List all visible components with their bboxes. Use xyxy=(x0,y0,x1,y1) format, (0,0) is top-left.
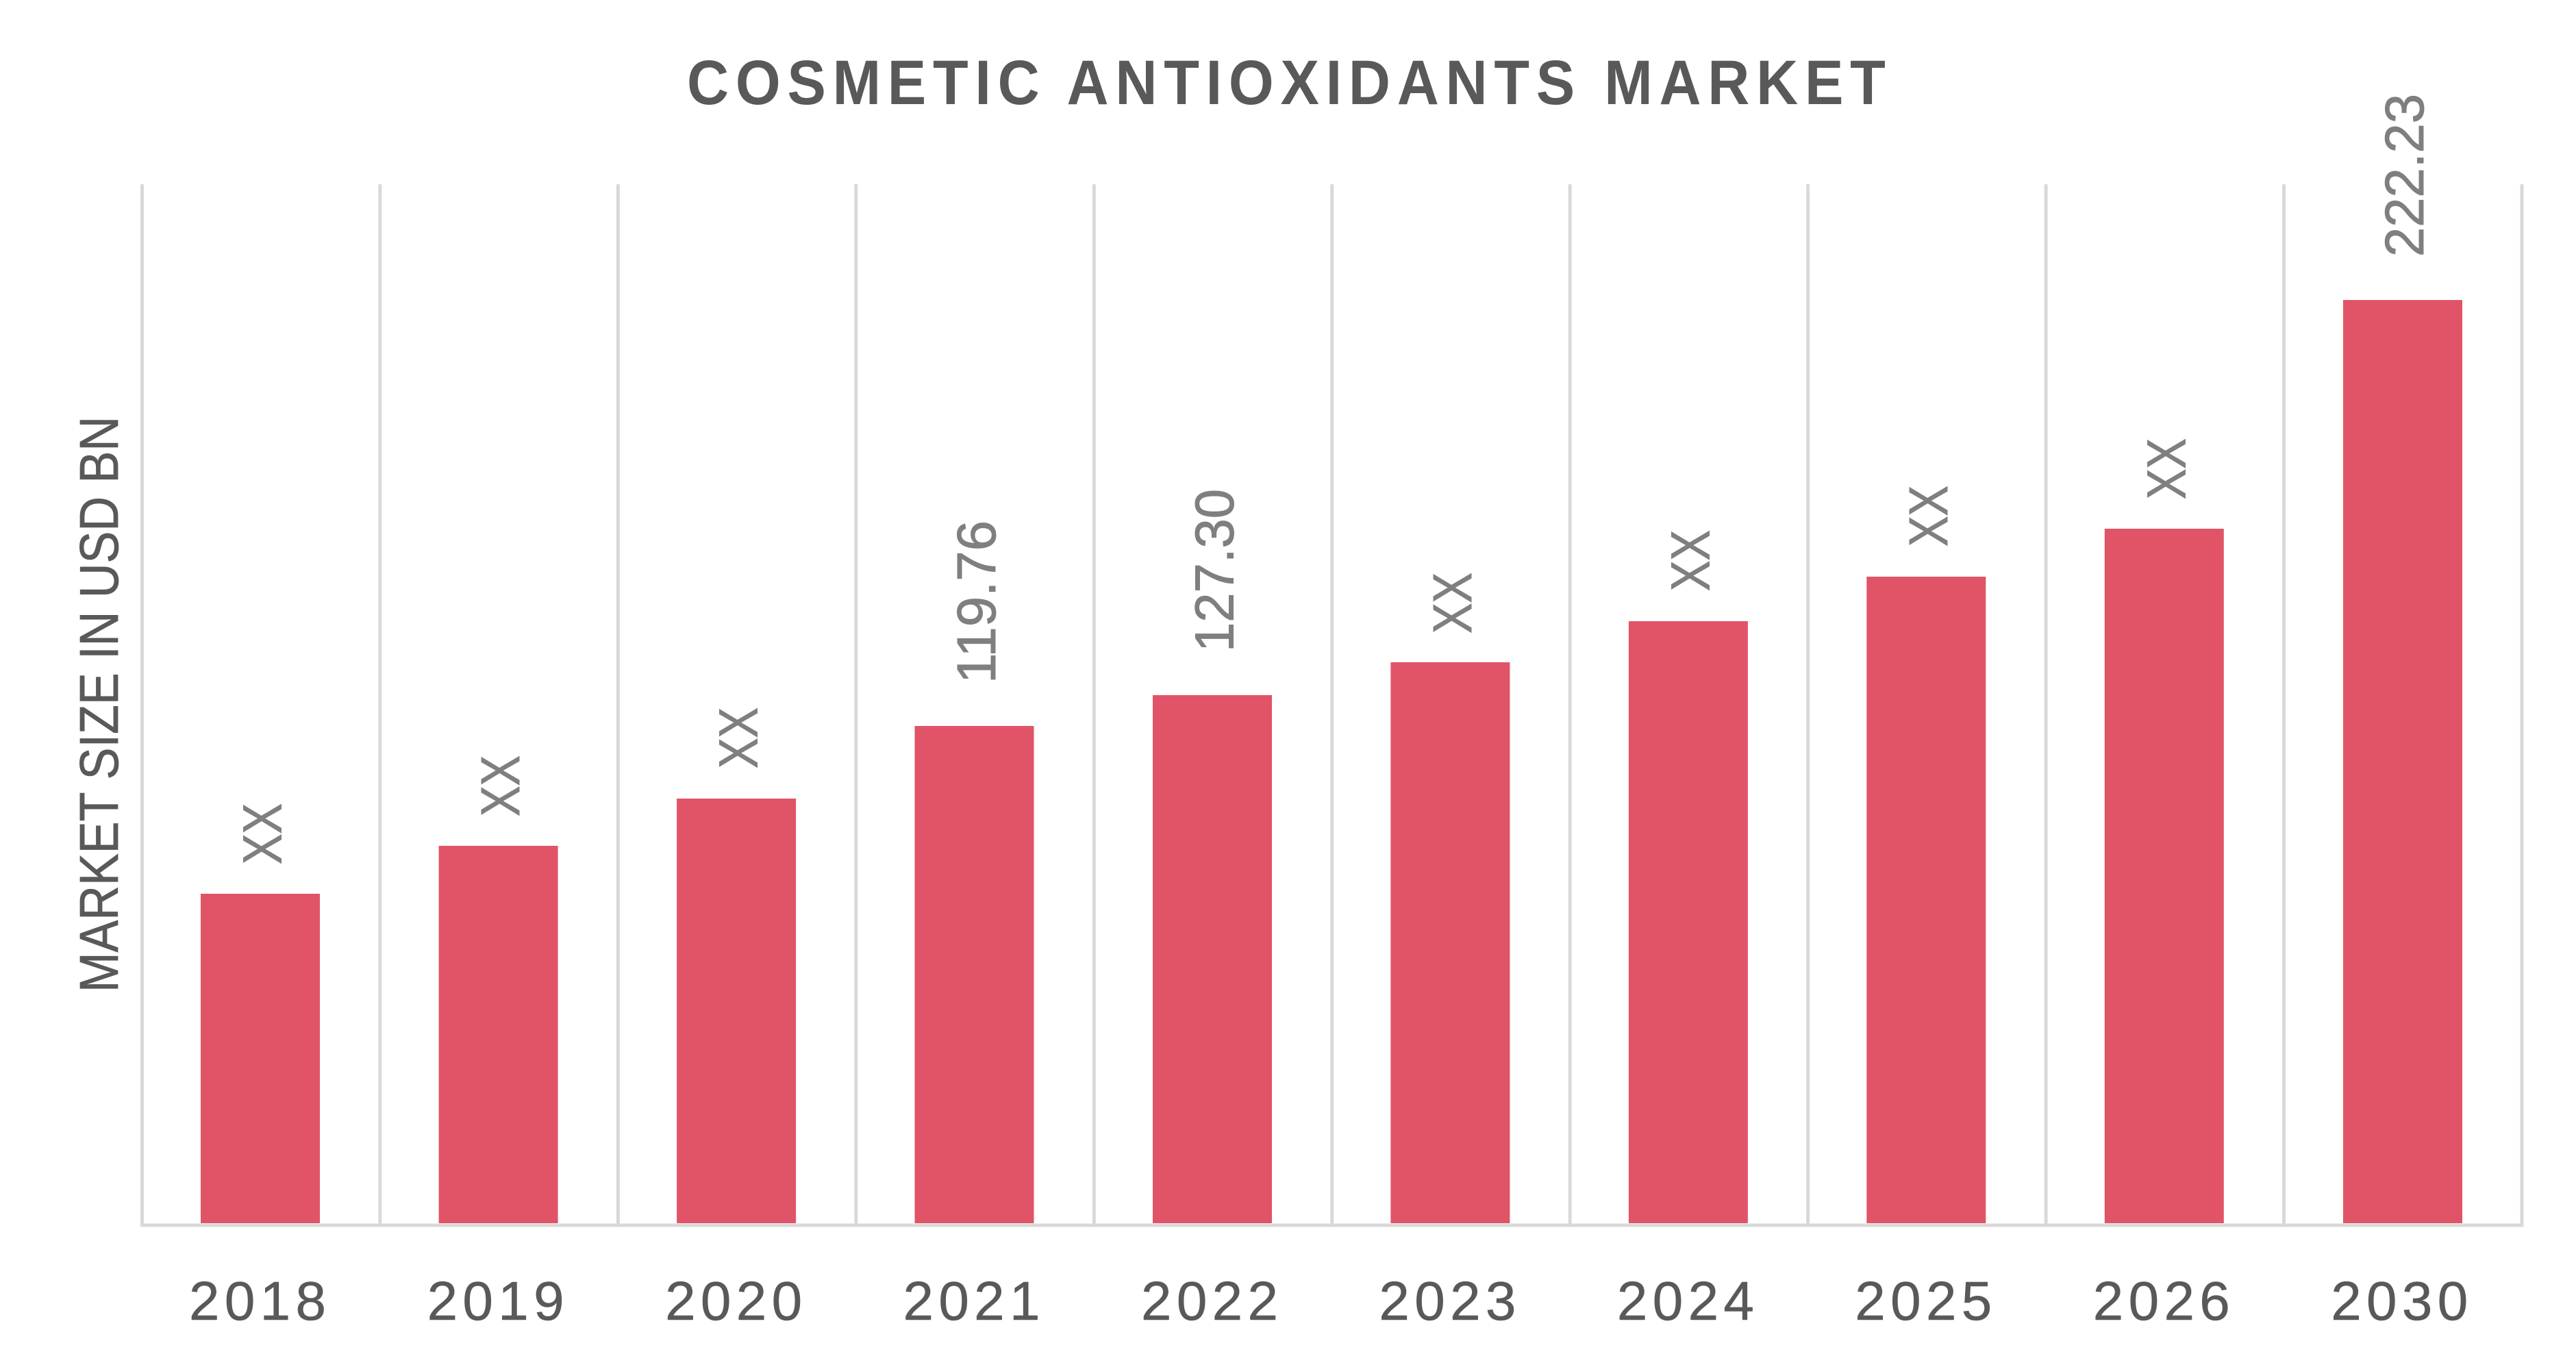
bar: 2030 xyxy=(2331,94,2468,1331)
bar: 2018: XX xyxy=(232,803,293,864)
bar: 2021: 119.76 xyxy=(946,521,1007,684)
bar: 2023: XX xyxy=(1422,573,1483,634)
bar: 2021 xyxy=(903,521,1040,1331)
bar: 2026: XX xyxy=(2136,438,2197,499)
bar: 2026 xyxy=(2093,438,2230,1331)
bar: 2018 xyxy=(189,803,326,1331)
y-axis title: MARKET SIZE IN USD BN xyxy=(68,416,129,992)
bar: 2030: 2030 xyxy=(2331,1270,2468,1331)
bar: 2018: 2018 xyxy=(189,1270,326,1331)
bar: 2026: 2026 xyxy=(2093,1270,2230,1331)
bar: 2019 xyxy=(427,755,564,1331)
bar: 2020: XX xyxy=(708,707,769,768)
bar: 2025 xyxy=(1855,486,1992,1331)
bar: 2023: 2023 xyxy=(1379,1270,1516,1331)
bar: 2020 xyxy=(665,707,802,1331)
bar: 2019: XX xyxy=(470,755,531,816)
bar: 2024 xyxy=(1617,530,1754,1331)
bar: 2030: 222.23 xyxy=(2374,94,2435,257)
bar: 2025: 2025 xyxy=(1855,1270,1992,1331)
bar: 2025: XX xyxy=(1898,486,1959,547)
bar: 2022: 2022 xyxy=(1141,1270,1278,1331)
bar: 2024: 2024 xyxy=(1617,1270,1754,1331)
title: COSMETIC ANTIOXIDANTS MARKET xyxy=(687,47,1886,118)
bar: 2020: 2020 xyxy=(665,1270,802,1331)
bar: 2023 xyxy=(1379,573,1516,1331)
bar: 2021: 2021 xyxy=(903,1270,1040,1331)
bar: 2022: 127.30 xyxy=(1184,489,1245,652)
bar: 2019: 2019 xyxy=(427,1270,564,1331)
bar: 2022 xyxy=(1141,489,1278,1331)
bar: 2024: XX xyxy=(1660,530,1721,591)
